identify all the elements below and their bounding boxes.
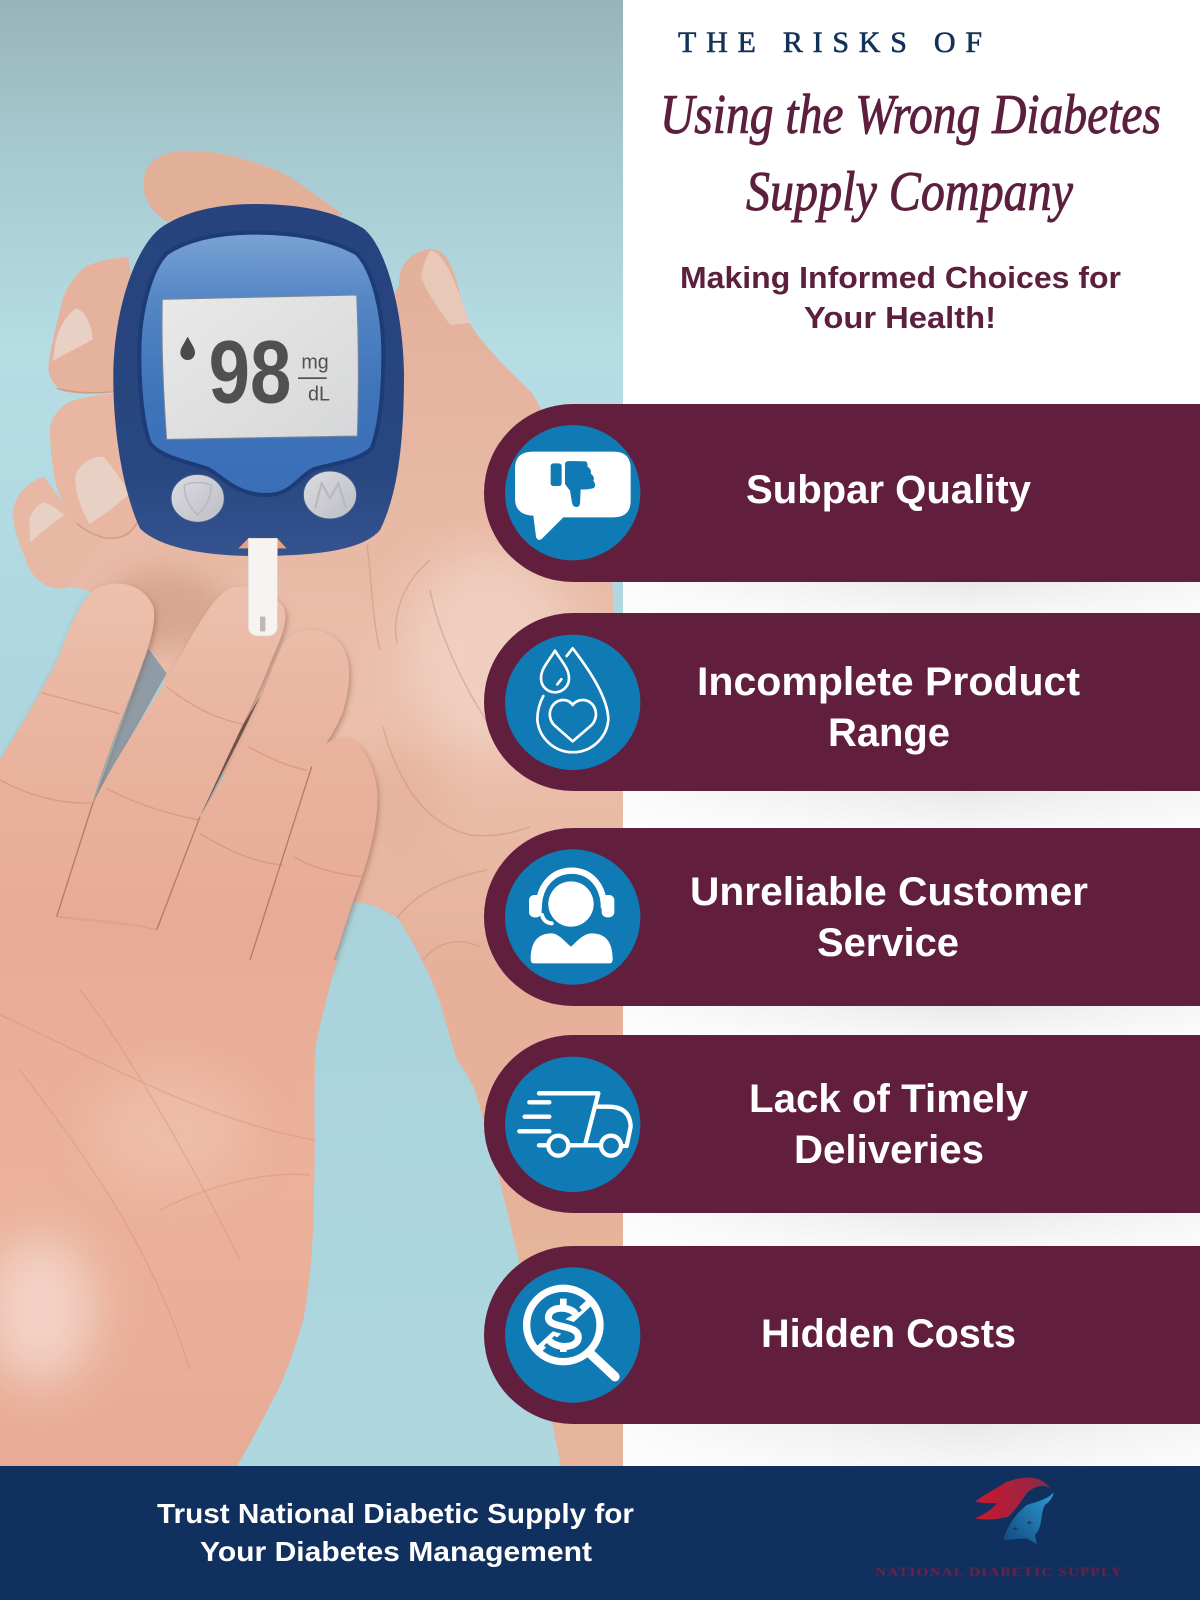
logo: national diabetic supply <box>875 1478 1123 1579</box>
fingers <box>0 583 377 970</box>
subtitle <box>680 260 1121 335</box>
palm creases, upper hand <box>367 545 530 960</box>
unit mg per dL: mg <box>301 352 329 374</box>
photo: hands holding glucose meter <box>0 0 623 1466</box>
label: subpar quality: Subpar Quality <box>746 468 1032 512</box>
shaded area behind fingertips <box>103 570 227 650</box>
hand holding the meter <box>13 151 623 1466</box>
finger creases and separations <box>0 687 364 960</box>
shadow gaps between fingers <box>93 648 260 817</box>
meter buttons <box>171 471 357 522</box>
panel: lack of timely deliveries <box>484 1035 1200 1213</box>
panel: unreliable customer service <box>484 828 1200 1006</box>
label: lack of timely deliveries <box>749 1077 1029 1172</box>
title <box>660 84 1161 223</box>
label: hidden costs: Hidden Costs <box>761 1312 1016 1356</box>
label: incomplete product range: Range <box>828 711 950 755</box>
label: lack of timely deliveries: Lack of Timely <box>749 1077 1029 1121</box>
thumb nail <box>421 250 470 325</box>
panel: hidden costs <box>484 1246 1200 1424</box>
meter face <box>139 233 383 495</box>
footer message: Trust National Diabetic Supply for <box>157 1498 634 1529</box>
footer message <box>157 1498 634 1567</box>
label: unreliable customer service <box>690 870 1088 965</box>
unit mg per dL <box>298 358 330 400</box>
reading: 98 <box>209 322 291 422</box>
pill shadows <box>623 582 1200 1466</box>
logo: national diabetic supply: NATIONAL DIABETIC SUPPLY <box>875 1564 1123 1579</box>
heading: the risks of: THE RISKS OF <box>678 26 982 59</box>
label: lack of timely deliveries: Deliveries <box>794 1128 984 1172</box>
test strip <box>238 538 287 636</box>
fingernails <box>29 308 129 543</box>
icon: magnifier over crossed dollar <box>505 1267 640 1403</box>
panel: subpar quality <box>484 404 1200 582</box>
label: incomplete product range: Incomplete Product <box>697 660 1080 704</box>
label: unreliable customer service: Unreliable Customer <box>690 870 1088 914</box>
blood drop symbol <box>180 337 195 360</box>
photo background <box>0 0 623 1466</box>
glucose meter <box>113 204 404 636</box>
subtitle: Making Informed Choices for <box>680 260 1121 295</box>
palm <box>0 900 337 1466</box>
icon: customer service headset <box>505 849 640 985</box>
icon: fast delivery truck <box>505 1057 640 1192</box>
palm highlight <box>405 550 575 750</box>
footer message: Your Diabetes Management <box>200 1536 592 1567</box>
label: unreliable customer service: Service <box>817 921 959 965</box>
label: incomplete product range <box>697 660 1080 755</box>
top finger and left fingers <box>13 151 343 660</box>
icon: drops with heart <box>505 635 640 770</box>
panel: incomplete product range <box>484 613 1200 791</box>
meter screen <box>162 295 358 439</box>
title: Supply Company <box>746 161 1073 223</box>
footer band <box>0 1466 1200 1600</box>
palm creases, open hand <box>0 990 314 1370</box>
unit mg per dL: dL <box>308 383 330 405</box>
icon: thumbs down speech bubble <box>505 425 640 560</box>
subtitle: Your Health! <box>804 300 996 335</box>
open hand with fingers <box>0 583 377 1466</box>
